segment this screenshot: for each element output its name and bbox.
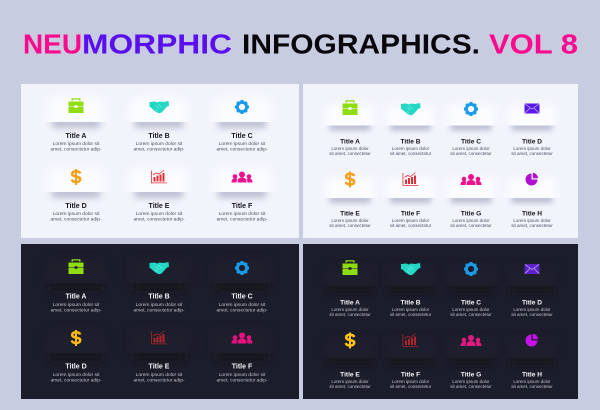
item: Title D: Lorem ipsum dolor xyxy=(513,307,551,312)
title: MORPHIC xyxy=(82,28,232,60)
item: Title B xyxy=(387,103,434,156)
item: Title D: Lorem ipsum dolor xyxy=(513,146,551,151)
item: Title E: sit amet, consectetur xyxy=(329,384,371,389)
item: Title A: Title A xyxy=(65,133,87,140)
title: VOL 8 xyxy=(489,28,578,60)
item: Title A: Lorem ipsum dolor xyxy=(331,146,369,151)
item: Title D: Lorem ipsum dolor sit xyxy=(53,372,100,378)
item: Title D xyxy=(508,264,556,317)
item: Title E: Title E xyxy=(340,372,360,378)
item: Title F: sit amet, consectetur xyxy=(390,223,432,228)
item: Title E: Title E xyxy=(149,203,170,210)
item: Title D: Title D xyxy=(65,203,87,210)
item: Title B: Lorem ipsum dolor xyxy=(392,146,430,151)
item: Title F xyxy=(214,330,270,383)
item: Title F: sit amet, consectetur xyxy=(390,384,432,389)
item: Title C: Title C xyxy=(231,133,253,140)
item: Title B: amet, consectetur adip- xyxy=(133,307,185,313)
item: Title F: Lorem ipsum dolor xyxy=(392,379,430,384)
item: Title D: Lorem ipsum dolor sit xyxy=(53,211,100,217)
item: Title C: amet, consectetur adip- xyxy=(216,307,268,313)
item: Title F xyxy=(387,172,434,228)
item: Title F: Title F xyxy=(401,372,420,378)
item: Title B: Lorem ipsum dolor sit xyxy=(136,302,183,308)
item: Title C: Title C xyxy=(461,138,481,146)
item: Title D: Title D xyxy=(65,364,87,370)
item: Title F: Lorem ipsum dolor sit xyxy=(219,211,266,217)
item: Title F: Lorem ipsum dolor xyxy=(392,218,430,223)
item: Title A: Title A xyxy=(340,138,360,146)
item: Title C: sit amet, consectetur xyxy=(450,151,492,156)
item: Title A xyxy=(48,259,104,313)
panel: light six items xyxy=(21,84,299,238)
item: Title E xyxy=(326,332,374,389)
title xyxy=(23,28,578,60)
item: Title A: Title A xyxy=(340,300,360,306)
item: Title G: sit amet, consectetur xyxy=(450,223,492,228)
item: Title D: sit amet, consectetur xyxy=(511,151,553,156)
item: Title B: Title B xyxy=(400,300,421,306)
item: Title H: sit amet, consectetur xyxy=(511,223,553,228)
item: Title A: Lorem ipsum dolor sit xyxy=(53,302,100,308)
item: Title A: amet, consectetur adip- xyxy=(50,307,102,313)
item: Title E: Lorem ipsum dolor sit xyxy=(136,372,183,378)
item: Title A: sit amet, consectetur xyxy=(329,151,371,156)
item: Title E: Lorem ipsum dolor xyxy=(331,218,369,223)
item: Title D xyxy=(508,104,556,156)
item: Title G: Lorem ipsum dolor xyxy=(452,379,490,384)
panel: dark six items xyxy=(21,244,299,399)
item: Title B: Lorem ipsum dolor sit xyxy=(136,141,183,147)
panel: dark eight items xyxy=(303,244,578,399)
item: Title H: Lorem ipsum dolor xyxy=(513,218,551,223)
item: Title B: sit amet, consectetur xyxy=(390,312,432,317)
item: Title B: Lorem ipsum dolor xyxy=(392,307,430,312)
item: Title F: amet, consectetur adip- xyxy=(216,216,268,222)
item: Title H: Title H xyxy=(522,210,542,218)
item: Title E xyxy=(326,172,374,228)
item: Title G: Title G xyxy=(461,210,481,218)
item: Title E: Title E xyxy=(149,364,170,370)
item: Title A xyxy=(48,98,104,152)
item: Title H xyxy=(508,334,556,389)
item: Title B: Title B xyxy=(400,138,421,146)
item: Title B xyxy=(131,99,187,152)
item: Title G xyxy=(447,174,495,228)
item: Title C: Title C xyxy=(231,294,253,300)
item: Title D: amet, consectetur adip- xyxy=(50,377,102,383)
item: Title D xyxy=(48,330,104,383)
item: Title B: amet, consectetur adip- xyxy=(133,146,185,152)
item: Title H: sit amet, consectetur xyxy=(511,384,553,389)
item: Title E: Lorem ipsum dolor xyxy=(331,379,369,384)
item: Title E: amet, consectetur adip- xyxy=(133,216,185,222)
item: Title A: sit amet, consectetur xyxy=(329,312,371,317)
item: Title C: Title C xyxy=(461,300,481,306)
item: Title A: Lorem ipsum dolor xyxy=(331,307,369,312)
item: Title D xyxy=(48,169,104,222)
item: Title F: Title F xyxy=(232,203,253,210)
item: Title E: amet, consectetur adip- xyxy=(133,377,185,383)
item: Title A: Lorem ipsum dolor sit xyxy=(53,141,100,147)
item: Title F: Title F xyxy=(401,210,420,218)
item: Title G: Lorem ipsum dolor xyxy=(452,218,490,223)
item: Title C: Lorem ipsum dolor sit xyxy=(219,141,266,147)
item: Title G: Title G xyxy=(461,372,481,378)
item: Title H: Title H xyxy=(522,372,542,378)
item: Title B xyxy=(387,263,434,317)
title: INFOGRAPHICS. xyxy=(242,28,480,60)
item: Title C: amet, consectetur adip- xyxy=(216,146,268,152)
item: Title B: sit amet, consectetur xyxy=(390,151,432,156)
item: Title E xyxy=(131,330,187,383)
item: Title F: Lorem ipsum dolor sit xyxy=(219,372,266,378)
item: Title G xyxy=(447,335,495,389)
item: Title A: amet, consectetur adip- xyxy=(50,146,102,152)
item: Title D: Title D xyxy=(522,138,542,146)
item: Title G: sit amet, consectetur xyxy=(450,384,492,389)
item: Title B xyxy=(131,260,187,313)
item: Title F: Title F xyxy=(232,364,253,370)
item: Title F: amet, consectetur adip- xyxy=(216,377,268,383)
item: Title D: sit amet, consectetur xyxy=(511,312,553,317)
panel: light eight items xyxy=(303,84,578,238)
item: Title D: Title D xyxy=(522,300,542,306)
item: Title B: Title B xyxy=(148,294,170,300)
item: Title H xyxy=(508,173,556,228)
item: Title C: Lorem ipsum dolor sit xyxy=(219,302,266,308)
title: NEU xyxy=(23,28,82,60)
item: Title C: sit amet, consectetur xyxy=(450,312,492,317)
item: Title C xyxy=(447,262,495,317)
item: Title A xyxy=(326,260,374,317)
item: Title H: Lorem ipsum dolor xyxy=(513,379,551,384)
item: Title C xyxy=(447,102,495,156)
item: Title C: Lorem ipsum dolor xyxy=(452,307,490,312)
item: Title D: amet, consectetur adip- xyxy=(50,216,102,222)
item: Title B: Title B xyxy=(148,133,170,140)
item: Title A xyxy=(326,100,374,156)
item: Title C: Lorem ipsum dolor xyxy=(452,146,490,151)
item: Title A: Title A xyxy=(65,294,87,300)
item: Title F xyxy=(214,169,270,222)
item: Title C xyxy=(214,260,270,313)
item: Title E: Title E xyxy=(340,210,360,218)
item: Title F xyxy=(387,334,434,389)
item: Title C xyxy=(214,99,270,152)
item: Title E xyxy=(131,169,187,222)
item: Title E: Lorem ipsum dolor sit xyxy=(136,211,183,217)
item: Title E: sit amet, consectetur xyxy=(329,223,371,228)
